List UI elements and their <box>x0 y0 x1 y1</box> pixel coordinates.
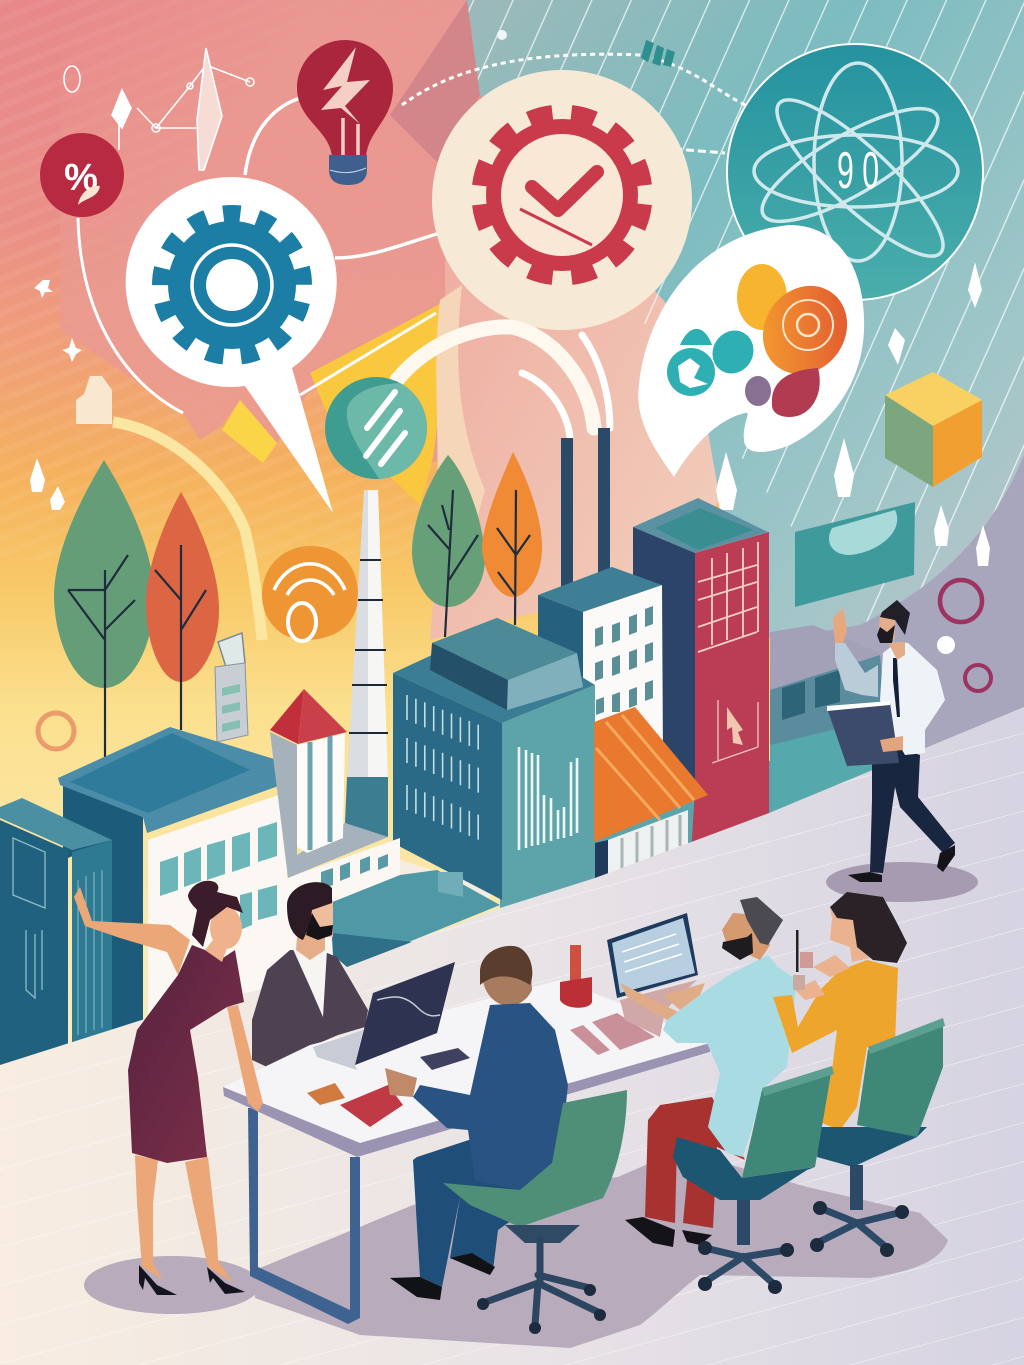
icon: percent badge: % <box>64 157 98 199</box>
arm of woman resting on table <box>227 1005 263 1112</box>
shoes <box>390 1253 495 1300</box>
icon: red gear with check <box>471 104 653 286</box>
person: man in light blue shirt <box>620 897 797 1247</box>
trousers <box>645 1097 745 1228</box>
icon: percent badge <box>40 133 124 217</box>
jacket <box>413 1003 568 1195</box>
trousers <box>413 1137 540 1287</box>
chair: green, middle <box>673 1066 834 1294</box>
icon: lightbulb <box>297 40 393 185</box>
icon: ladder tablet <box>215 633 248 742</box>
smoke trails <box>397 327 610 436</box>
palette blobs <box>667 264 864 417</box>
white tree and spark icons <box>30 262 990 654</box>
white office block <box>538 567 670 760</box>
chimney <box>345 490 388 837</box>
walking man with tablet <box>827 600 955 882</box>
face and hair <box>210 907 242 949</box>
ground fill behind city <box>148 860 500 1030</box>
hand <box>385 1068 417 1097</box>
conference table <box>223 980 710 1324</box>
person: woman in yellow <box>773 892 907 1130</box>
icon: slashed teal circle <box>325 377 430 480</box>
industrial city <box>0 428 772 1080</box>
smokestacks <box>561 428 610 593</box>
icon: chart doodle <box>64 48 254 170</box>
person: man in blue suit <box>385 946 568 1300</box>
left building with blue roof <box>58 727 400 1040</box>
dress <box>128 945 244 1163</box>
legs <box>135 1155 233 1283</box>
chair: green, blue-suit man <box>443 1090 627 1334</box>
speech bubble: red gear <box>432 70 692 330</box>
shoes <box>625 1217 712 1247</box>
background hill and small building <box>770 625 925 830</box>
icon: atom badge: 9 0 <box>837 142 879 200</box>
connector lines <box>78 54 745 640</box>
red roof tower <box>270 689 388 889</box>
laptop: center <box>313 962 455 1070</box>
teal courtyard <box>330 870 500 967</box>
billboard sign <box>795 502 915 607</box>
red tower <box>633 498 769 870</box>
floor <box>0 707 1024 1365</box>
orange roof house <box>594 707 708 885</box>
floor shadows <box>84 862 978 1348</box>
person: man in dark suit <box>252 882 368 1070</box>
chair: green, right <box>810 1018 945 1257</box>
icon: teal data chip <box>497 30 675 67</box>
person: woman in maroon dress <box>74 881 245 1295</box>
desk items <box>307 945 655 1127</box>
icon: wifi badge <box>262 546 358 641</box>
head <box>482 960 532 1006</box>
central building <box>393 618 595 930</box>
raised arm <box>74 887 190 975</box>
speech bubble: blue gear <box>126 177 337 513</box>
trees <box>54 452 542 798</box>
ring decorations <box>38 580 991 749</box>
shirt <box>663 955 797 1157</box>
icon: blue gear <box>153 206 311 364</box>
icon: cube <box>885 372 982 487</box>
laptop: right <box>607 913 698 1037</box>
shoes <box>139 1265 245 1295</box>
speech bubble: palette <box>638 225 864 477</box>
arms skin <box>620 983 705 1020</box>
icon: atom badge <box>727 44 983 300</box>
left tall building <box>0 798 112 1080</box>
face <box>722 913 770 960</box>
